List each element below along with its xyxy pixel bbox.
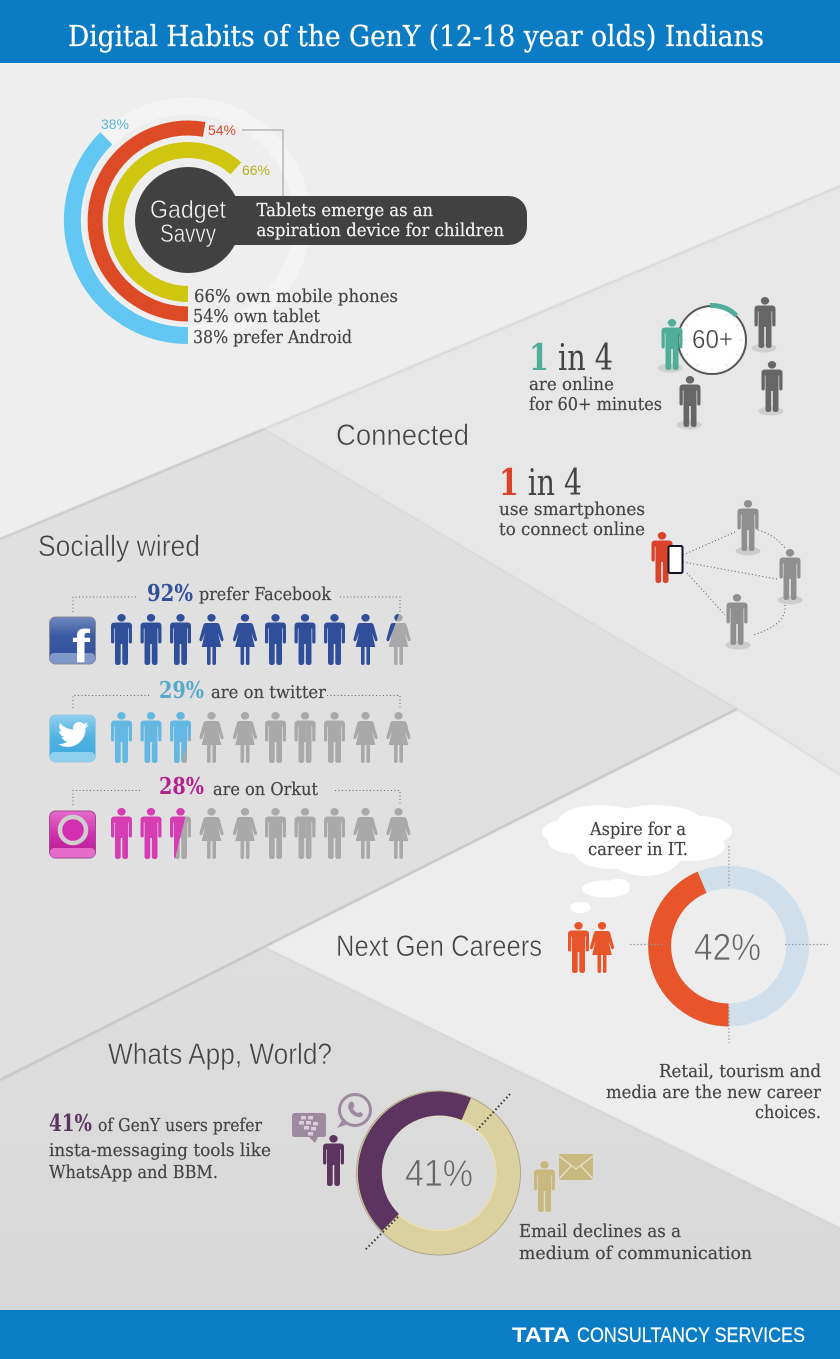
dotted divider [365, 1094, 510, 1250]
icon: network people [726, 500, 802, 650]
dark callout pill [188, 196, 527, 245]
icon: blackberry messenger [292, 1113, 326, 1143]
dark circle [135, 167, 241, 273]
thought cloud [542, 805, 732, 913]
heading: Socially wired [38, 530, 200, 563]
messaging text [49, 1110, 271, 1183]
header band [0, 0, 840, 63]
cloud text: career in IT. [588, 839, 688, 860]
background panel: whats app [0, 947, 840, 1310]
messaging text: WhatsApp and BBM. [49, 1162, 218, 1183]
icon: facebook: f [72, 620, 91, 672]
facebook stat [147, 580, 332, 607]
stat: smartphones: to connect online [499, 519, 645, 540]
orkut stat [159, 773, 319, 800]
people row: facebook [111, 614, 411, 665]
title: Digital Habits of the GenY (12-18 year olds) Indians [68, 19, 764, 53]
ring: tablet 54% [95, 128, 204, 314]
icon: couple [568, 922, 614, 973]
donut chart 41% [356, 1091, 520, 1255]
email text: medium of communication [519, 1243, 752, 1264]
icon: twitter [50, 715, 96, 762]
facebook stat: prefer Facebook [199, 584, 332, 605]
circle heading [150, 196, 226, 248]
twitter stat [159, 677, 326, 704]
stat: online 60+ minutes: 1 in 4 [529, 337, 613, 379]
connector line [242, 130, 283, 196]
stat list [193, 286, 398, 348]
orkut stat: are on Orkut [213, 779, 319, 800]
stat: online 60+ minutes: for 60+ minutes [529, 394, 662, 415]
panel: next gen careers [336, 805, 828, 1123]
email text: Email declines as a [519, 1221, 681, 1242]
twitter stat: are on twitter [211, 682, 326, 703]
icon: 60+ clock [678, 305, 746, 374]
logo text: CONSULTANCY SERVICES [577, 1324, 805, 1347]
ring label 54%: 54% [208, 123, 236, 138]
heading: Connected [336, 419, 469, 452]
stat list: 54% own tablet [193, 306, 321, 327]
background panel: socially wired [0, 429, 737, 1080]
twitter stat: 29% [159, 677, 204, 704]
logo text [512, 1324, 805, 1347]
ring: mobile 66% [116, 150, 236, 294]
stat: smartphones: use smartphones [499, 499, 645, 520]
donut chart 42%: 42% [694, 927, 761, 969]
icon: online people [662, 297, 782, 427]
people row: orkut [111, 808, 411, 859]
cloud text [588, 819, 688, 860]
career text: Retail, tourism and [659, 1061, 821, 1082]
callout text [256, 200, 504, 241]
messaging text: 41% [49, 1110, 92, 1137]
circle heading: Savvy [160, 220, 216, 248]
icon: 60+ clock: 60+ [692, 324, 733, 354]
career text: media are the new career [606, 1082, 821, 1103]
callout text: Tablets emerge as an [256, 200, 433, 221]
panel fold shadows [0, 186, 840, 1228]
callout text: aspiration device for children [256, 220, 504, 241]
cloud text: Aspire for a [589, 819, 686, 840]
orkut stat: 28% [159, 773, 204, 800]
icon: orkut [50, 811, 96, 858]
background panel: connected [264, 186, 840, 775]
career text [606, 1061, 821, 1123]
heading: Next Gen Careers [336, 930, 542, 963]
icon: whatsapp [337, 1094, 370, 1128]
icon: facebook [50, 617, 96, 672]
email text [519, 1221, 752, 1264]
icon: person with smartphone [652, 532, 682, 583]
stat list: 66% own mobile phones [194, 286, 398, 307]
messaging text: of GenY users prefer [98, 1115, 262, 1136]
messaging text: insta-messaging tools like [49, 1140, 271, 1161]
network dotted lines [683, 530, 785, 635]
heading: Whats App, World? [108, 1038, 332, 1071]
panel: whats app [49, 1038, 752, 1264]
panel: connected [336, 297, 802, 650]
dotted axes [630, 846, 828, 1043]
ring label 38%: 38% [101, 117, 129, 132]
ring: android 38% [72, 138, 188, 336]
ring label 66%: 66% [242, 163, 270, 178]
stat: online 60+ minutes: are online [529, 374, 614, 395]
logo text: TATA [512, 1324, 570, 1347]
panel: gadget savvy [72, 106, 527, 348]
stat: online 60+ minutes [529, 337, 662, 415]
donut chart 41%: 41% [405, 1153, 473, 1195]
donut chart 42% [660, 877, 798, 1015]
people row: twitter [111, 712, 411, 763]
dotted brackets [73, 597, 400, 805]
icon: envelope [559, 1154, 593, 1180]
background panel: next gen careers [264, 709, 840, 1228]
icon: person shadows [658, 344, 784, 430]
faint white ring [74, 106, 302, 334]
background panel: gadget savvy [0, 63, 840, 539]
facebook stat: 92% [147, 580, 193, 607]
career text: choices. [755, 1102, 821, 1123]
footer band [0, 1310, 840, 1359]
panel: socially wired [38, 530, 411, 859]
icon: tan person [534, 1161, 555, 1212]
stat: smartphones [499, 462, 645, 540]
stat list: 38% prefer Android [193, 327, 352, 348]
icon: purple person [323, 1135, 344, 1186]
circle heading: Gadget [150, 196, 226, 224]
stat: smartphones: 1 in 4 [499, 462, 582, 504]
